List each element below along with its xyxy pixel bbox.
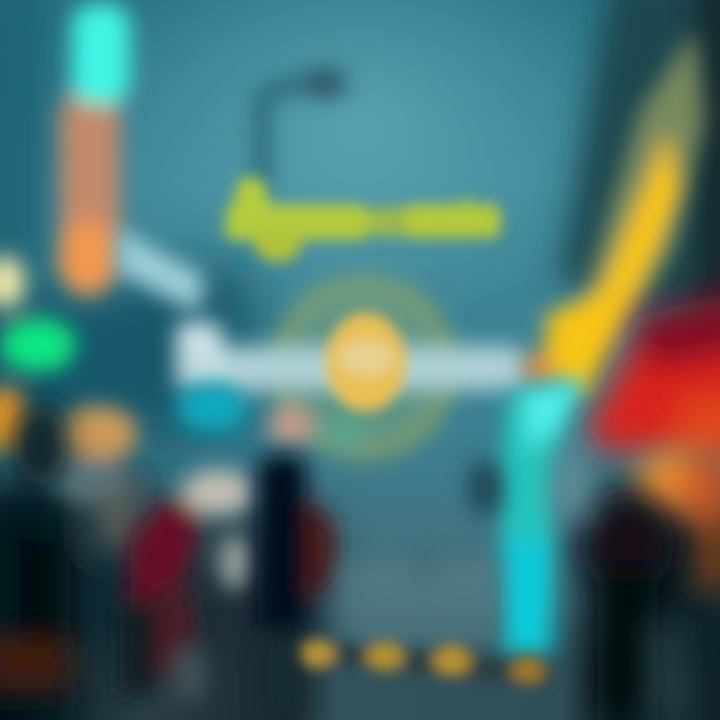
- right cyan neon column: [500, 378, 586, 654]
- striped barrier: [300, 639, 550, 686]
- white diagonal neon: [118, 228, 206, 314]
- distant figures: [340, 460, 502, 645]
- right pale lights: [555, 450, 674, 720]
- foreground silhouette with backpack: [258, 455, 336, 720]
- left small signs: [0, 256, 138, 504]
- yellow heading: [222, 178, 504, 262]
- left dark building: [0, 0, 250, 440]
- yellow heading: Agamcode: [222, 190, 504, 248]
- teal drop under the band: [176, 384, 248, 432]
- red coat person: [120, 470, 254, 700]
- white text band: Agamcode: [172, 338, 532, 398]
- concentric target circle: [268, 282, 450, 454]
- right dark building: [560, 0, 720, 330]
- left neon sign: cyan and orange tower: [58, 4, 130, 296]
- right silhouette person: [582, 495, 674, 720]
- right yellow arrow: [525, 30, 705, 398]
- white text band: [172, 322, 532, 398]
- lower dark masses: [0, 470, 720, 720]
- lamp post: [262, 68, 347, 190]
- left silhouette crowd: [0, 403, 141, 720]
- ground shadow band: [0, 636, 720, 720]
- central yellow coin: [326, 312, 406, 412]
- right red awning: [590, 286, 720, 460]
- right orange light: [635, 448, 720, 590]
